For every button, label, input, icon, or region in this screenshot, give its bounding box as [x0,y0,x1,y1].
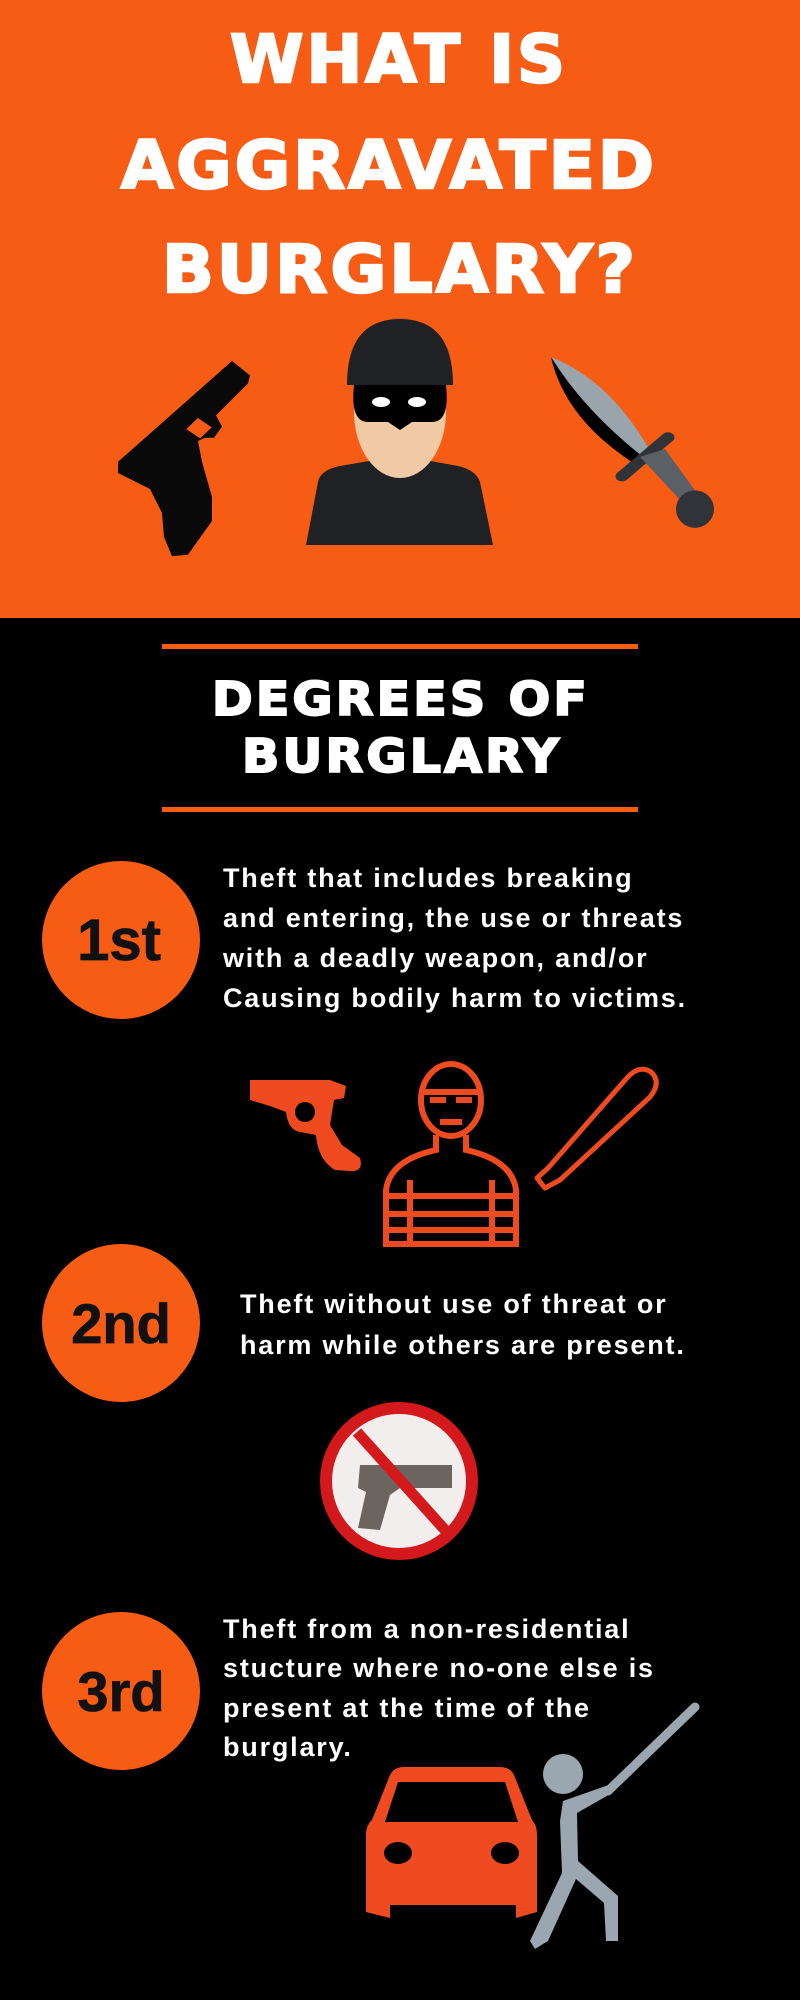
text: 2nd degree: Theft without use of threat or [240,1289,667,1319]
icon: knife [551,357,714,528]
title: WHAT IS [230,21,568,98]
text: 1st degree: Causing bodily harm to victims. [223,983,687,1013]
heading: degrees of burglary [212,672,590,783]
badge: 1st [42,861,200,1019]
text: 3rd degree [223,1614,655,1762]
text: 1st degree: with a deadly weapon, and/or [222,943,648,973]
text: 3rd degree: Theft from a non-residential [223,1614,630,1644]
badge: 1st: 1st [77,908,161,973]
text: 2nd degree: harm while others are present. [240,1330,686,1360]
text: 1st degree: Theft that includes breaking [223,863,633,893]
icon: car [366,1767,537,1918]
badge: 2nd [42,1244,200,1402]
title: BURGLARY? [162,231,638,308]
header panel [0,0,800,618]
icon: no guns sign [326,1408,472,1554]
divider bottom [162,807,638,812]
text: 3rd degree: burglary. [223,1732,353,1762]
text: 1st degree: and entering, the use or threats [223,903,684,933]
text: 1st degree [222,863,687,1013]
badge: 2nd: 2nd [71,1292,171,1355]
icon: masked burglar [306,319,493,545]
heading: degrees of burglary: BURGLARY [242,729,562,783]
icon: pistol [118,361,250,556]
title: AGGRAVATED [121,127,657,204]
icon: stick figure with bat [530,1707,695,1949]
divider top [162,644,638,649]
title [121,21,657,308]
badge: 3rd: 3rd [77,1660,165,1723]
badge: 3rd [42,1612,200,1770]
text: 2nd degree [240,1289,686,1360]
text: 3rd degree: stucture where no-one else is [223,1653,655,1683]
heading: degrees of burglary: DEGREES OF [212,672,590,726]
icon: prisoner [386,1064,516,1244]
icon: baseball bat [537,1069,656,1188]
text: 3rd degree: present at the time of the [223,1693,591,1723]
icon: revolver [250,1080,361,1171]
